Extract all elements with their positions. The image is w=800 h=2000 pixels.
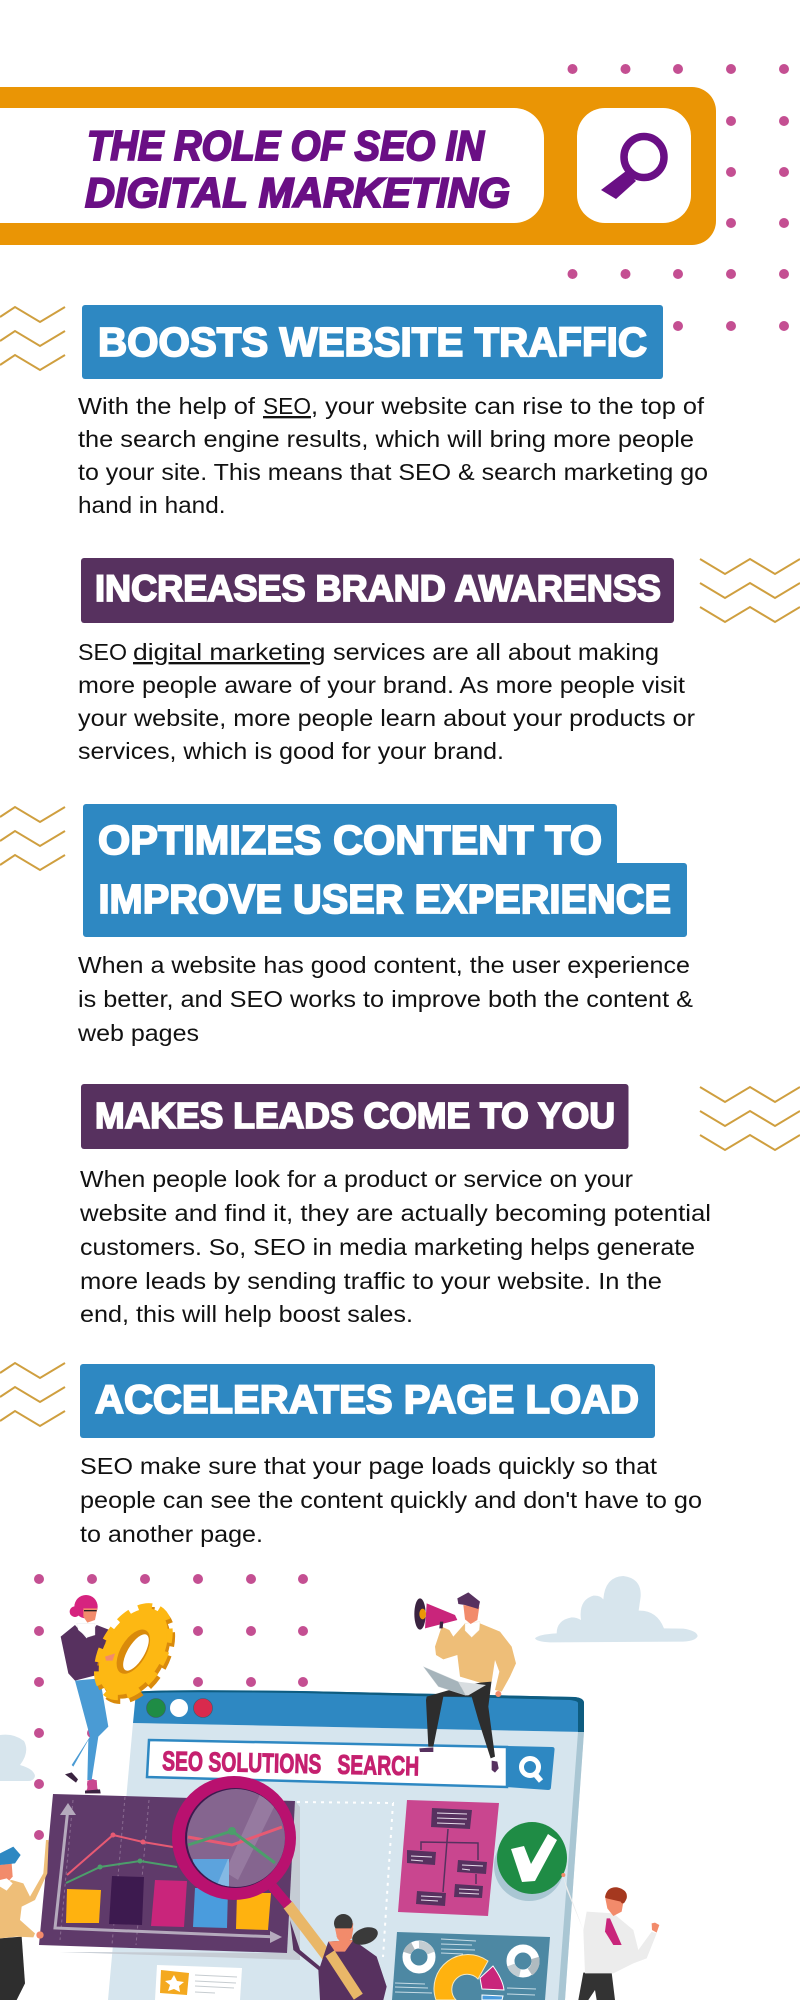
sweater xyxy=(435,1623,516,1692)
text block: services, which is good for your brand. xyxy=(78,738,504,764)
dot pattern: bottom left xyxy=(34,1574,308,1840)
laptop xyxy=(423,1667,466,1695)
text block: SEO xyxy=(263,393,311,419)
chart board xyxy=(39,1794,300,1960)
magnifying glass xyxy=(172,1776,327,1960)
text block: customers. So, SEO in media marketing helps generate xyxy=(80,1234,695,1260)
line series xyxy=(66,1835,177,1883)
icon: magnifier xyxy=(601,136,664,199)
board guide lines xyxy=(60,1797,149,1945)
check badge xyxy=(494,1822,567,1901)
text block: people can see the content quickly and don't have to go xyxy=(80,1487,702,1513)
text block: web pages xyxy=(77,1020,199,1046)
panel text lines xyxy=(395,1939,536,1995)
heading: IMPROVE USER EXPERIENCE xyxy=(98,876,671,922)
zigzag decoration: section 4 xyxy=(700,1087,800,1150)
text block: your website, more people learn about your products or xyxy=(78,705,695,731)
heading: MAKES LEADS COME TO YOU xyxy=(95,1095,615,1136)
text block: to another page. xyxy=(80,1521,263,1547)
panel: increases brand awareness xyxy=(78,558,695,764)
panel: accelerates page load xyxy=(80,1364,702,1547)
heading bar xyxy=(81,1084,628,1149)
handle over figure xyxy=(330,1953,358,1997)
title: THE ROLE OF SEO IN xyxy=(87,122,486,169)
text block: hand in hand. xyxy=(78,492,226,518)
person: man at left holding board xyxy=(0,1840,49,2000)
megaphone xyxy=(414,1598,457,1630)
heading: OPTIMIZES CONTENT TO xyxy=(98,817,602,863)
zigzag decoration: section 1 xyxy=(0,307,65,370)
window buttons xyxy=(146,1698,212,1718)
flowchart panel xyxy=(398,1800,499,1916)
gear xyxy=(81,1593,188,1714)
donut chart xyxy=(434,1954,504,2000)
text block: With the help of xyxy=(78,393,255,419)
text block: end, this will help boost sales. xyxy=(80,1301,413,1327)
person: man with tie xyxy=(561,1873,659,2000)
text block xyxy=(78,393,708,518)
header banner xyxy=(0,87,716,245)
person: man with megaphone xyxy=(414,1592,516,1773)
heading bar xyxy=(80,1364,655,1438)
hair xyxy=(74,1595,98,1618)
zigzag decoration: section 3 xyxy=(0,807,65,870)
text block: more people aware of your brand. As more people visit xyxy=(78,672,686,698)
text block: the search engine results, which will bring more people xyxy=(78,426,694,452)
text block: website and find it, they are actually becoming potential xyxy=(79,1200,711,1226)
text block xyxy=(79,1166,711,1327)
lens xyxy=(172,1776,296,1900)
illustration: SEO browser scene xyxy=(0,1576,698,2000)
handle xyxy=(288,1905,358,1997)
text block: is better, and SEO works to improve both the content & xyxy=(78,986,693,1012)
jeans xyxy=(72,1678,108,1780)
cloud: right xyxy=(535,1576,698,1642)
certificate card xyxy=(155,1965,242,2000)
heading xyxy=(98,817,671,922)
person: woman at bottom xyxy=(290,1914,387,2000)
sweater xyxy=(61,1625,118,1681)
small pie left xyxy=(406,1944,432,1970)
text block: digital marketing xyxy=(133,639,326,665)
zigzag decoration: section 5 xyxy=(0,1363,65,1426)
face and hair xyxy=(463,1605,479,1624)
text block xyxy=(78,639,695,764)
heading bar xyxy=(83,804,687,937)
dot pattern: top right xyxy=(568,64,789,331)
panel: makes leads come to you xyxy=(79,1084,711,1327)
data panel xyxy=(392,1932,550,2000)
text block: When a website has good content, the user experience xyxy=(78,952,690,978)
zigzag decoration: section 2 xyxy=(700,559,800,622)
panel: boosts website traffic xyxy=(78,305,708,518)
heading bar xyxy=(81,558,674,623)
title xyxy=(85,122,510,216)
axes xyxy=(55,1808,278,1937)
panel: optimizes content xyxy=(77,804,693,1046)
title: DIGITAL MARKETING xyxy=(85,169,510,216)
browser window xyxy=(108,1690,584,2000)
search bar xyxy=(147,1740,555,1790)
heading: ACCELERATES PAGE LOAD xyxy=(95,1378,639,1422)
text block xyxy=(80,1453,702,1547)
text block: more leads by sending traffic to your website. In the xyxy=(80,1268,662,1294)
bars xyxy=(66,1876,271,1930)
heading: BOOSTS WEBSITE TRAFFIC xyxy=(98,319,647,365)
cloud: left xyxy=(0,1735,35,1781)
search text: SEO SOLUTIONS SEARCH xyxy=(162,1746,419,1781)
text block: , your website can rise to the top of xyxy=(311,393,704,419)
text block: to your site. This means that SEO & search marketing go xyxy=(78,459,708,485)
search icon xyxy=(522,1758,541,1781)
small pie right xyxy=(510,1948,536,1974)
trousers xyxy=(426,1680,495,1758)
hand xyxy=(105,1653,115,1661)
heading bar xyxy=(82,305,663,379)
text block: SEO make sure that your page loads quickly so that xyxy=(80,1453,657,1479)
text block: SEO xyxy=(78,639,127,665)
text block: services are all about making xyxy=(333,639,659,665)
heading: INCREASES BRAND AWARENSS xyxy=(95,568,661,609)
window body xyxy=(108,1723,584,2000)
text block xyxy=(77,952,693,1046)
person: woman with gear xyxy=(61,1593,188,1793)
window title bar xyxy=(133,1690,584,1732)
text block: When people look for a product or service on your xyxy=(80,1166,633,1192)
dotted content frame xyxy=(297,1802,393,1957)
